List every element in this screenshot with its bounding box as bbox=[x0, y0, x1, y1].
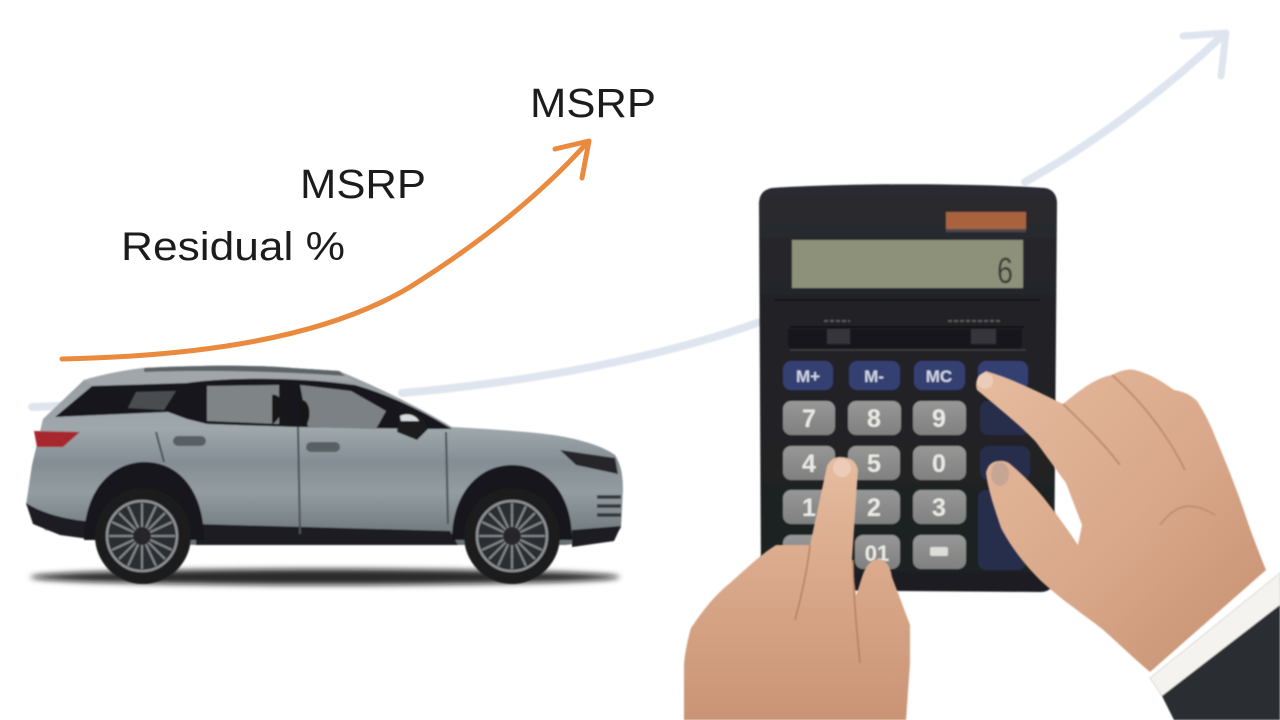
car front window bbox=[300, 385, 386, 429]
number keys: 4 bbox=[802, 450, 816, 478]
background pale arrow bbox=[32, 33, 1226, 407]
number keys bbox=[783, 401, 1030, 570]
orange growth arrow bbox=[62, 141, 589, 359]
number keys: 2 bbox=[867, 494, 881, 522]
function keys: M- bbox=[864, 367, 884, 386]
car middle window bbox=[207, 385, 279, 424]
number keys: 8 bbox=[867, 405, 881, 433]
car tail light bbox=[34, 431, 80, 447]
calculator body bbox=[759, 184, 1057, 592]
car rear wheel bbox=[84, 462, 204, 584]
number keys: 7 bbox=[802, 405, 816, 433]
number keys: 01 bbox=[865, 541, 889, 566]
function keys: M+ bbox=[796, 367, 820, 386]
car door lines bbox=[156, 427, 448, 534]
calculator bbox=[759, 184, 1057, 592]
number keys: 9 bbox=[932, 405, 946, 433]
label: MSRP top: MSRP bbox=[530, 80, 656, 126]
label: MSRP middle: MSRP bbox=[300, 161, 426, 207]
car seats bbox=[272, 395, 310, 426]
car mirror bbox=[397, 413, 428, 440]
LCD display bbox=[792, 240, 1023, 288]
solar panel bbox=[946, 212, 1026, 229]
display digit: 6 bbox=[997, 250, 1013, 291]
right hand pressing keys bbox=[976, 370, 1266, 672]
label: Residual %: Residual % bbox=[121, 225, 345, 269]
car head light bbox=[560, 450, 618, 474]
function keys: MC bbox=[926, 367, 952, 386]
car roof bbox=[84, 366, 355, 388]
car ground shadow bbox=[30, 569, 620, 585]
car rear side window bbox=[128, 391, 176, 410]
car window frame bbox=[55, 379, 452, 429]
car: grey SUV bbox=[26, 366, 623, 585]
function keys bbox=[783, 361, 1028, 390]
bevel line bbox=[775, 299, 1040, 301]
number keys: 3 bbox=[932, 494, 946, 522]
car front wheel bbox=[452, 465, 572, 584]
shirt cuff and suit sleeve bbox=[1150, 573, 1280, 720]
number keys: 0 bbox=[932, 450, 946, 478]
number keys: 1 bbox=[802, 494, 816, 522]
car body bbox=[26, 366, 623, 545]
slider strip bbox=[788, 321, 1026, 350]
car front grille bbox=[597, 497, 621, 515]
car lower trim bbox=[26, 503, 621, 547]
car door handles bbox=[173, 436, 206, 446]
number keys: 5 bbox=[867, 450, 881, 478]
left hand pressing keys bbox=[684, 457, 910, 720]
